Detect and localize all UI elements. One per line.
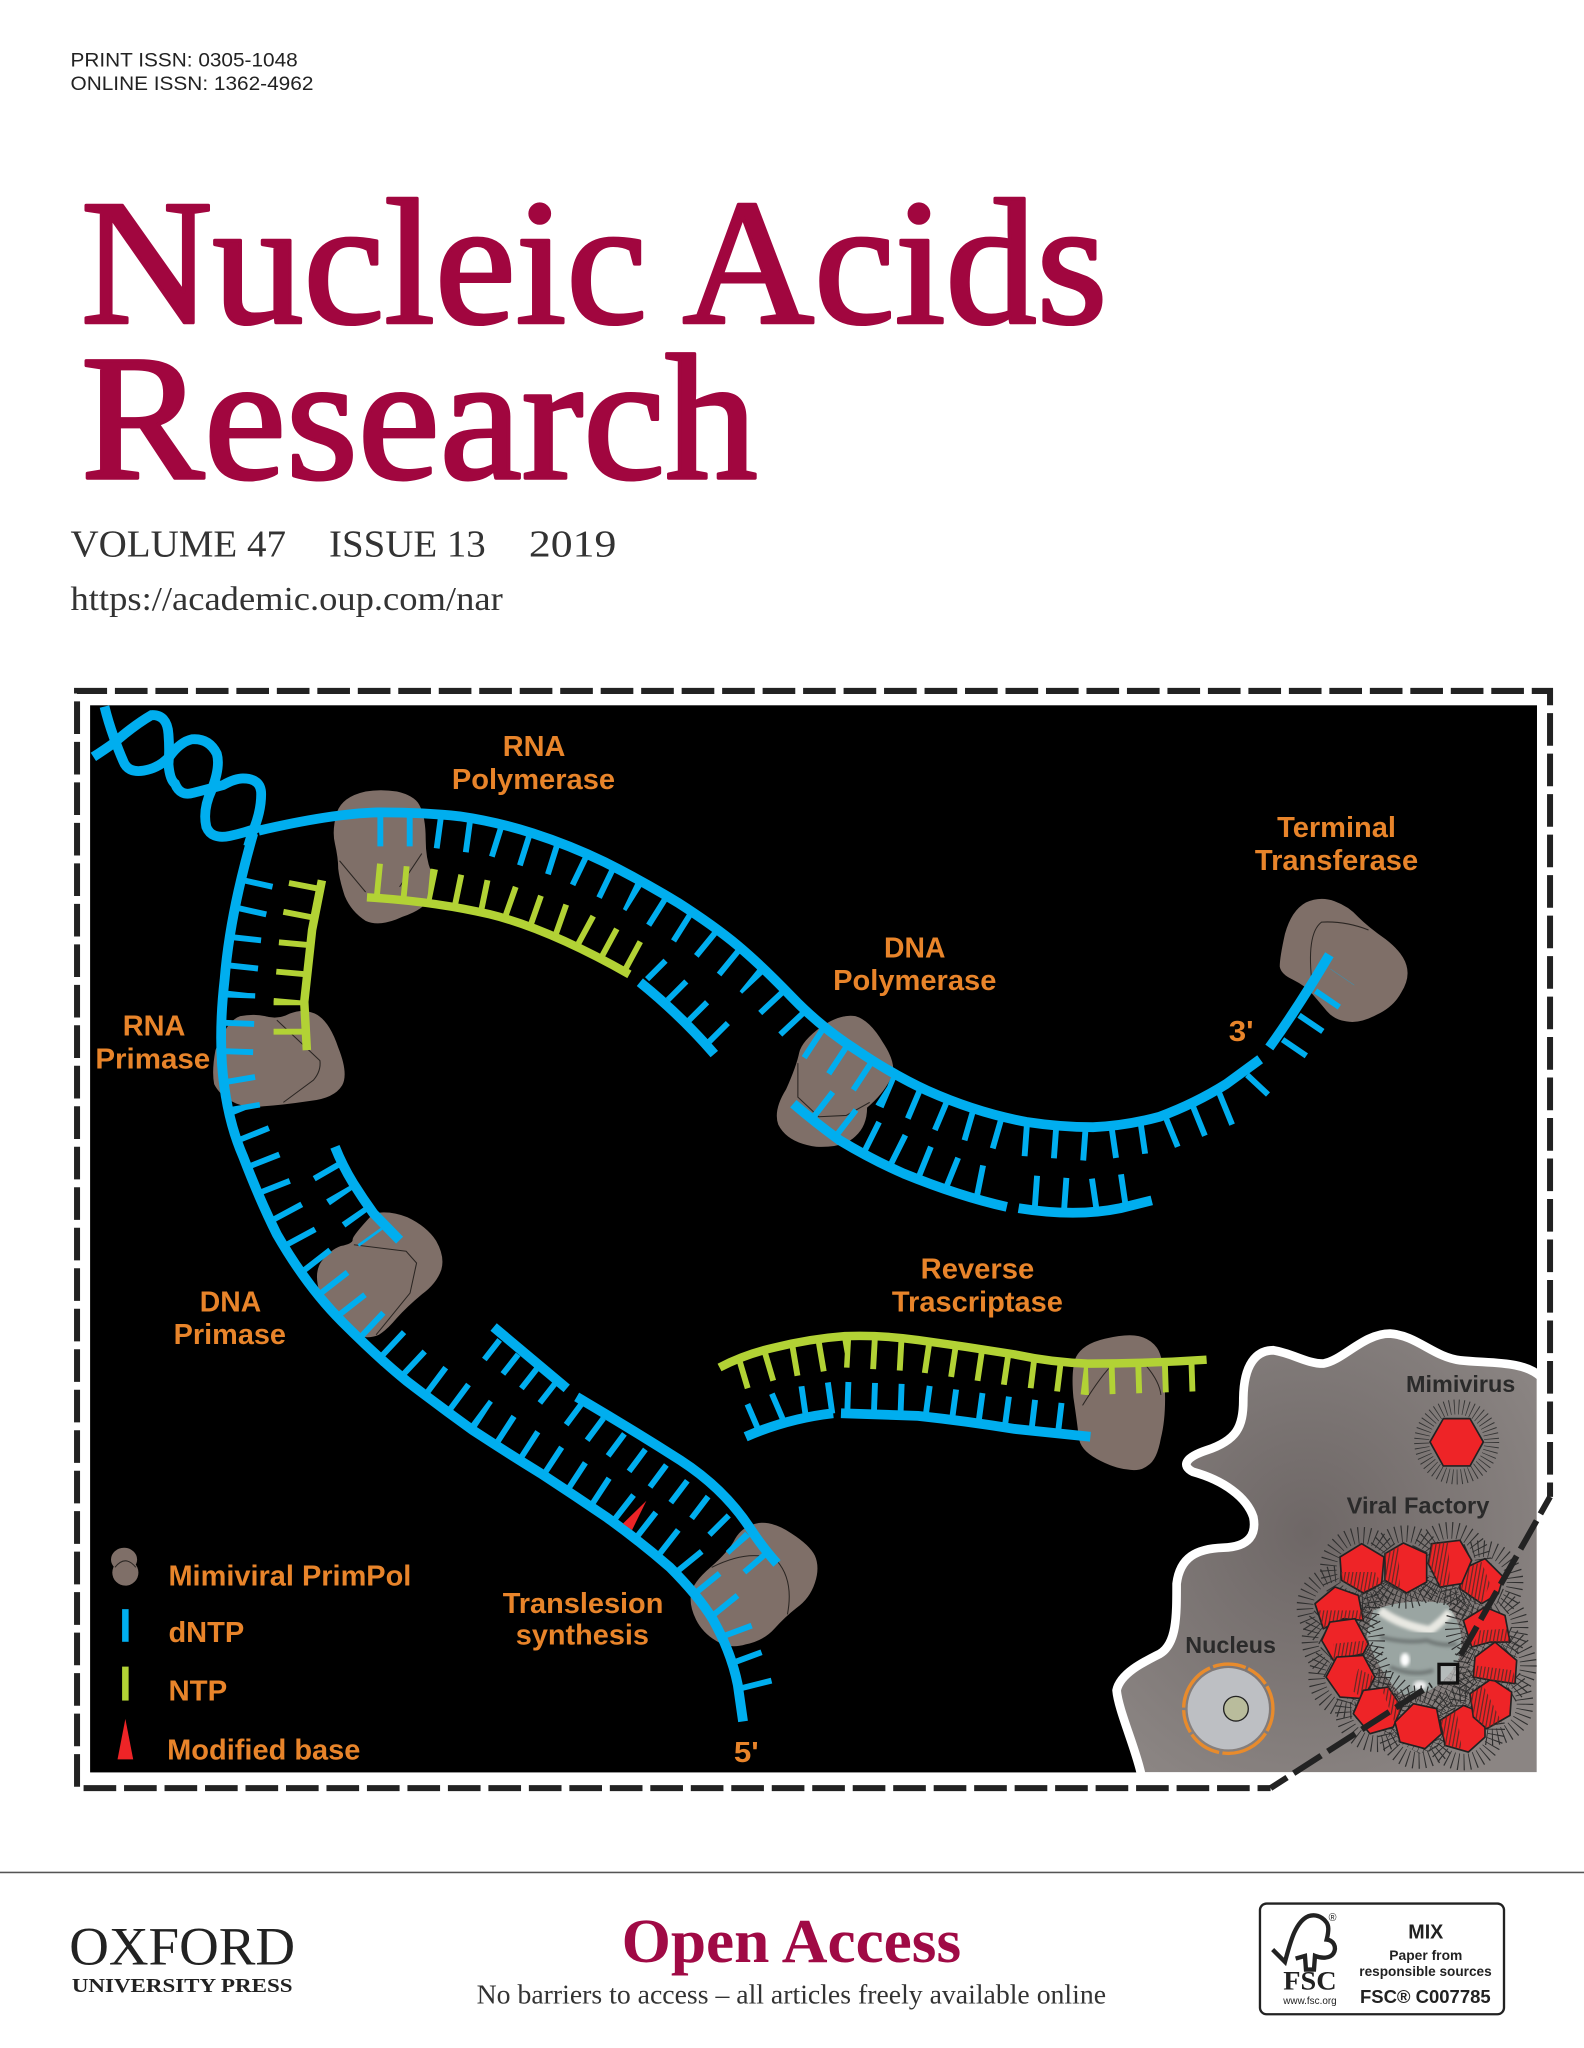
label: DNA Primase: Primase: [174, 1319, 286, 1351]
title: Nucleic Acids: [81, 164, 1107, 362]
enzyme: DNA primase: [317, 1212, 442, 1337]
volume and issue line: [71, 523, 616, 565]
main template strand with ticks: [221, 833, 760, 1721]
logo: Oxford University Press: OXFORD: [69, 1916, 295, 1976]
lower strand at DNA polymerase: [793, 1104, 1152, 1213]
open access heading: Open Access: [622, 1906, 961, 1976]
label: DNA Polymerase: [833, 932, 996, 997]
panel: black diagram background: [90, 705, 1537, 1772]
legend icon: NTP: [122, 1667, 129, 1701]
label: 3 prime: 3': [1229, 1016, 1254, 1048]
upper template strand with ticks: [259, 812, 1268, 1144]
enzyme: reverse transcriptase: [1073, 1335, 1165, 1470]
title: Research: [81, 319, 757, 517]
legend text: dNTP: dNTP: [168, 1617, 244, 1649]
3 prime strand end with ticks: [1269, 955, 1342, 1050]
label: RNA Primase: Primase: [95, 1043, 210, 1075]
modified base marker: [623, 1501, 646, 1530]
label: DNA Polymerase: DNA: [884, 932, 945, 964]
reverse transcriptase strands: [720, 1336, 1207, 1437]
MIX label text: Paper from: [1389, 1947, 1462, 1963]
RNA primer in primase: [289, 880, 322, 1050]
icon: FSC tree: [1273, 1915, 1335, 1970]
panel: host cell: [1117, 1334, 1541, 1776]
label: Viral Factory: Viral Factory: [1347, 1493, 1489, 1519]
label: Nucleus: Nucleus: [1185, 1632, 1276, 1658]
icon: mimivirus particle: [1422, 1407, 1492, 1477]
journal url: https://academic.oup.com/nar: [71, 581, 503, 618]
FSC wordmark: FSC: [1283, 1967, 1337, 1996]
label: RNA Polymerase: RNA: [503, 731, 565, 763]
enzyme: DNA polymerase: [777, 1016, 893, 1147]
double helix: [93, 707, 261, 846]
legend icon: dNTP: [122, 1609, 129, 1642]
enzyme: RNA primase: [213, 1011, 345, 1107]
label: Terminal Transferase: Transferase: [1255, 845, 1418, 877]
MIX label text: [1359, 1921, 1492, 2007]
icon: nucleus: [1184, 1664, 1273, 1753]
ISSN block: ONLINE ISSN: 1362-4962: [71, 74, 313, 95]
logo: Oxford University Press: UNIVERSITY PRESS: [72, 1976, 293, 1997]
MIX label text: MIX: [1408, 1921, 1444, 1944]
ISSN block: [71, 51, 313, 95]
zoom square marker: [1439, 1664, 1458, 1683]
legend icon: modified base: [118, 1719, 133, 1759]
label: Terminal Transferase: Terminal: [1277, 812, 1396, 844]
label: RNA Polymerase: [452, 731, 615, 796]
MIX label text: FSC® C007785: [1360, 1986, 1491, 2007]
MIX label text: responsible sources: [1359, 1963, 1492, 1979]
volume and issue line: VOLUME 47: [71, 523, 286, 565]
label: DNA Primase: DNA: [200, 1286, 261, 1318]
ISSN block: PRINT ISSN: 0305-1048: [71, 51, 298, 72]
legend text: Mimiviral PrimPol: Mimiviral PrimPol: [168, 1561, 411, 1593]
FSC website: www.fsc.org: [1282, 1996, 1337, 2007]
open access tagline: No barriers to access – all articles freely available online: [477, 1980, 1106, 2010]
legend: [111, 1548, 411, 1766]
legend text: Modified base: Modified base: [167, 1734, 360, 1766]
label: Reverse Trascriptase: [892, 1254, 1063, 1318]
enzyme: RNA polymerase: [334, 790, 434, 923]
volume and issue line: ISSUE 13: [329, 523, 486, 565]
label: Terminal Transferase: [1255, 812, 1418, 877]
label: Mimivirus: Mimivirus: [1406, 1371, 1515, 1397]
volume and issue line: 2019: [529, 523, 616, 565]
label: Reverse Trascriptase: Reverse: [921, 1254, 1034, 1286]
dashed callout border: [77, 691, 1550, 1788]
enzyme: translesion synthesis: [691, 1523, 817, 1646]
strand at DNA primase: [325, 1147, 400, 1240]
registered mark: ®: [1329, 1912, 1337, 1924]
label: Translesion synthesis: synthesis: [516, 1619, 649, 1651]
last tick before gap: [1247, 1075, 1268, 1095]
strand at translesion synthesis: [490, 1327, 777, 1574]
legend icon: PrimPol: [111, 1548, 138, 1586]
enzyme: terminal transferase: [1280, 899, 1408, 1022]
label: 5 prime: 5': [734, 1737, 759, 1769]
label: Reverse Trascriptase: Trascriptase: [892, 1286, 1063, 1318]
title: [81, 164, 1107, 517]
legend text: NTP: NTP: [168, 1676, 227, 1708]
label: Translesion synthesis: Translesion: [503, 1588, 663, 1620]
cell body: [1117, 1334, 1541, 1776]
label: DNA Polymerase: Polymerase: [833, 965, 996, 997]
label: RNA Primase: [95, 1011, 210, 1075]
viral factory: [1305, 1530, 1528, 1762]
RNA strand in polymerase: [367, 880, 639, 974]
footer rule: [0, 1872, 1584, 1873]
label: DNA Primase: [174, 1286, 286, 1351]
FSC certification box: [1260, 1904, 1504, 2014]
label: RNA Polymerase: Polymerase: [452, 764, 615, 796]
label: RNA Primase: RNA: [123, 1011, 185, 1043]
blue primer after RNA: [640, 968, 726, 1054]
label: Translesion synthesis: [503, 1588, 663, 1651]
